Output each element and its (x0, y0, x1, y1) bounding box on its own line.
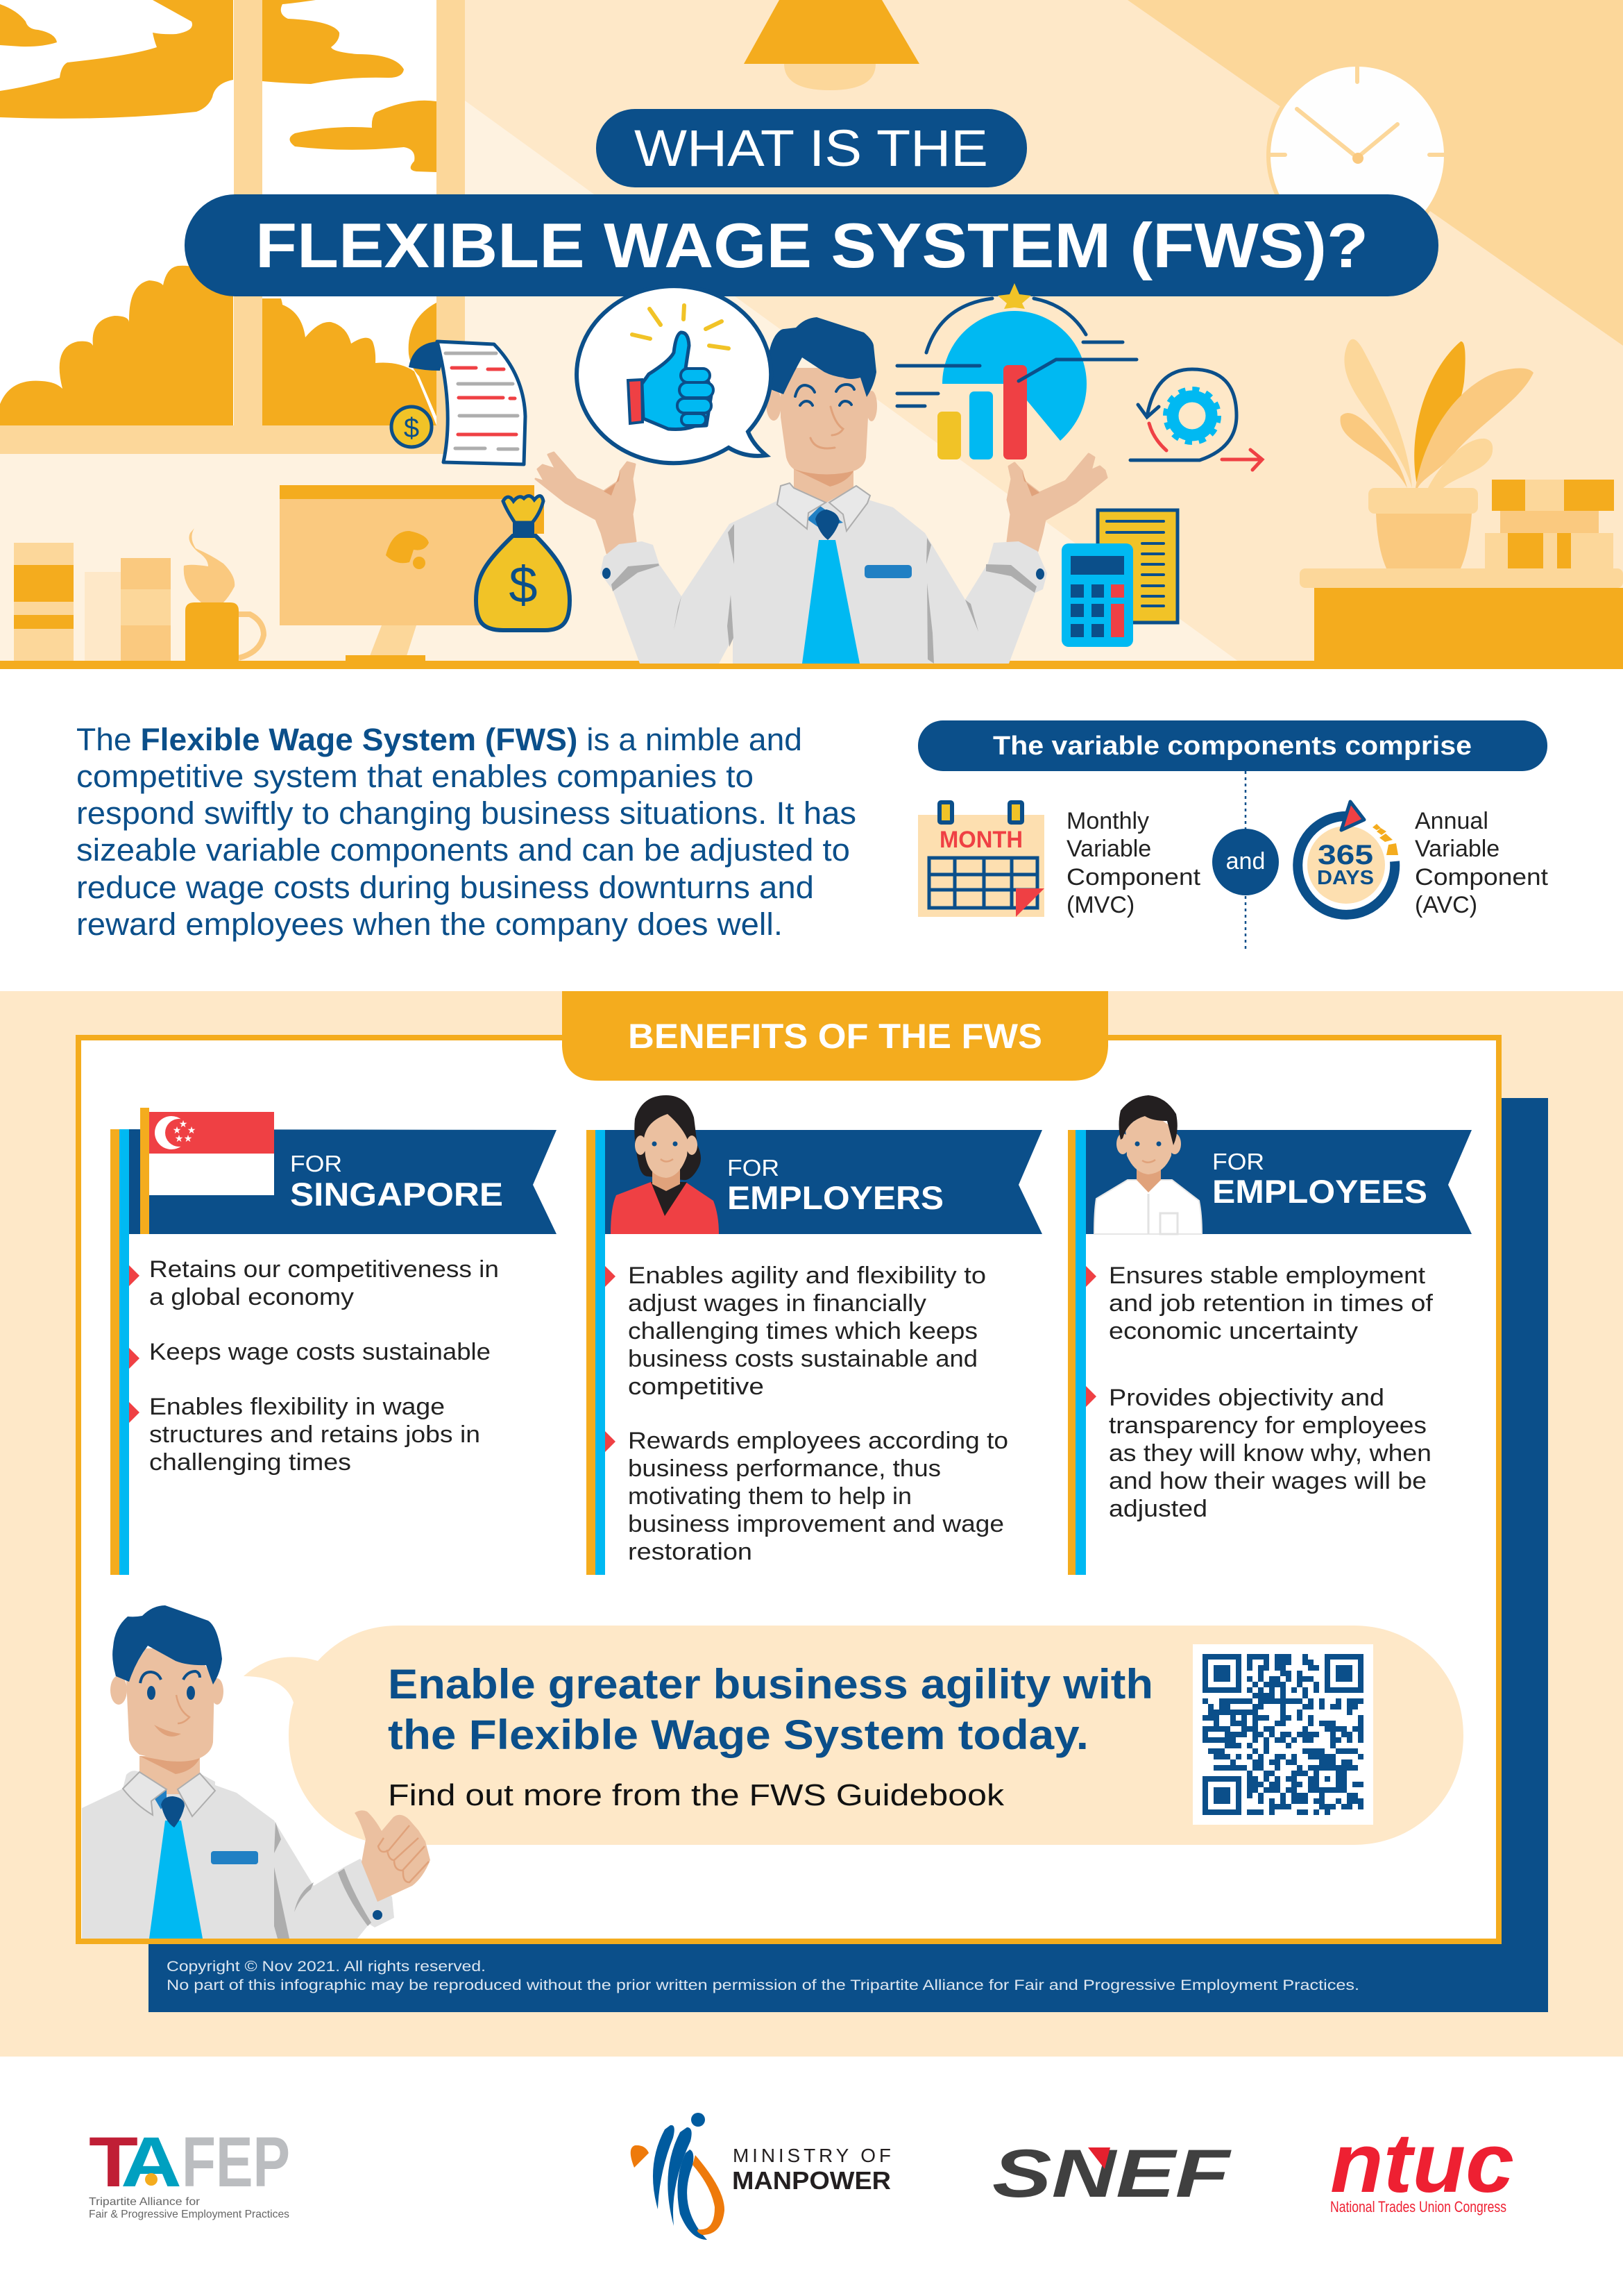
QR code (1193, 1644, 1373, 1825)
text: annual variable component: Variable (1415, 836, 1499, 862)
icon: singapore flag: ★ (184, 1133, 192, 1144)
ribbon title: FOR (1212, 1149, 1264, 1174)
title: what is the: WHAT IS THE (634, 119, 988, 177)
bullets (129, 1265, 139, 1423)
benefit list (1109, 1263, 1434, 1522)
intro paragraph: respond swiftly to changing business situations. It has (76, 795, 856, 831)
benefit list: business performance, thus (628, 1455, 941, 1482)
benefit list: Enables flexibility in wage (149, 1394, 445, 1420)
icon: singapore flag: ★ (187, 1124, 196, 1136)
intro paragraph: reduce wage costs during business downturns and (76, 870, 814, 905)
benefit list: a global economy (149, 1284, 354, 1310)
benefit list: business improvement and wage (628, 1511, 1004, 1537)
icon: monthly calendar (918, 802, 1044, 917)
ribbon title (290, 1151, 503, 1213)
window with clouds and bushes (0, 0, 465, 454)
collar (807, 506, 843, 527)
text: annual variable component: Annual (1415, 808, 1488, 834)
benefits section background (0, 991, 1623, 2057)
benefit list: structures and retains jobs in (149, 1421, 480, 1448)
text: annual variable component: (AVC) (1415, 892, 1477, 918)
benefit list: challenging times which keeps (628, 1318, 978, 1344)
right plant (1341, 339, 1533, 568)
text: annual variable component (1415, 808, 1549, 918)
coffee mug with steam (184, 528, 264, 664)
title: flexible wage system: FLEXIBLE WAGE SYSTEM (FWS)? (255, 211, 1368, 281)
benefit list: Ensures stable employment (1109, 1263, 1426, 1289)
figure: employee (1094, 1095, 1202, 1234)
benefit list: and how their wages will be (1109, 1468, 1427, 1494)
icon: 365 days cycle (1298, 802, 1398, 915)
call-to-action text: the Flexible Wage System today. (388, 1712, 1089, 1758)
benefit list: Keeps wage costs sustainable (149, 1339, 491, 1365)
logo: NTUC: National Trades Union Congress (1330, 2198, 1506, 2215)
figure: businesswoman (611, 1095, 719, 1234)
ribbon title: EMPLOYERS (727, 1179, 944, 1216)
ribbon title: FOR (290, 1151, 342, 1176)
logo: ministry of manpower (631, 2113, 891, 2240)
text: monthly variable component: (MVC) (1067, 892, 1135, 918)
ribbon title: SINGAPORE (290, 1176, 503, 1213)
copyright notice: No part of this infographic may be reproduced without the prior written permission of the Tripartite Alliance for Fair and Progressive Employment Practices. (167, 1977, 1359, 1993)
text: annual variable component: Component (1415, 864, 1549, 890)
icon: 365 days cycle: DAYS (1317, 867, 1374, 889)
benefit list: Retains our competitiveness in (149, 1256, 499, 1283)
benefit list: adjust wages in financially (628, 1290, 926, 1317)
benefit list: Rewards employees according to (628, 1428, 1008, 1454)
intro paragraph: reward employees when the company does well. (76, 906, 783, 942)
intro paragraph: sizeable variable components and can be adjusted to (76, 832, 850, 868)
badge (865, 565, 912, 578)
benefit list: transparency for employees (1109, 1412, 1427, 1439)
intro paragraph (76, 722, 856, 942)
logo: TAFEP: Tripartite Alliance for (89, 2196, 201, 2208)
icon: singapore flag (140, 1108, 274, 1234)
benefit list: business costs sustainable and (628, 1346, 978, 1372)
icon: 365 days cycle: 365 (1318, 840, 1373, 870)
benefit list: as they will know why, when (1109, 1440, 1431, 1467)
benefits card shadow and copyright bar (148, 1098, 1548, 2012)
benefit list: restoration (628, 1539, 752, 1565)
bullets (605, 1266, 615, 1452)
panel: for employees (1068, 1095, 1472, 1575)
icon: singapore flag: ★ (173, 1124, 181, 1136)
intro paragraph: The Flexible Wage System (FWS) is a nimble and (76, 722, 802, 757)
panel: for employers (586, 1095, 1042, 1575)
logo: NTUC: ntuc (1330, 2116, 1514, 2210)
ceiling lamp (744, 0, 919, 90)
benefit list: Enables agility and flexibility to (628, 1263, 986, 1289)
shirt folds (611, 524, 1037, 664)
ribbon title (727, 1155, 944, 1216)
benefit list: competitive (628, 1374, 764, 1400)
left hand and forearm (536, 453, 636, 553)
and badge: and (1226, 848, 1265, 875)
benefit list: Provides objectivity and (1109, 1385, 1384, 1411)
text: monthly variable component: Component (1067, 864, 1201, 890)
icon: speech bubble with thumbs up (577, 286, 771, 463)
icon: singapore flag: ★ (175, 1133, 183, 1144)
ribbon title: EMPLOYEES (1212, 1173, 1427, 1210)
benefits heading tab: BENEFITS OF THE FWS (628, 1017, 1042, 1056)
text: monthly variable component: Monthly (1067, 808, 1149, 834)
icon: receipt with coin: $ (404, 413, 419, 444)
logo: ministry of manpower: MINISTRY OF (733, 2145, 891, 2166)
bullets (1086, 1266, 1096, 1407)
copyright notice: Copyright © Nov 2021. All rights reserved. (167, 1959, 486, 1975)
right side table and books (1300, 480, 1623, 664)
panel: for singapore (110, 1108, 556, 1575)
title: flexible wage system (185, 194, 1438, 296)
benefit list (149, 1256, 499, 1476)
logo: TAFEP: FEP (182, 2122, 290, 2202)
copyright notice (167, 1959, 1359, 1993)
call-to-action text (388, 1661, 1153, 1812)
benefit list: challenging times (149, 1449, 351, 1476)
logo: TAFEP: T (89, 2122, 138, 2202)
left books (14, 543, 171, 664)
icon: gear cycle (1130, 369, 1262, 470)
tie (802, 540, 860, 664)
and badge (1212, 829, 1279, 895)
benefit list: adjusted (1109, 1496, 1207, 1522)
benefit list: economic uncertainty (1109, 1318, 1358, 1344)
right hand and forearm (1008, 454, 1107, 551)
call-to-action text: Enable greater business agility with (388, 1661, 1153, 1707)
text: monthly variable component (1067, 808, 1201, 918)
benefit list: and job retention in times of (1109, 1290, 1434, 1317)
icon: money bag (476, 496, 570, 630)
benefit list: motivating them to help in (628, 1483, 912, 1510)
wall clock (1268, 65, 1446, 246)
icon: singapore flag: ★ (179, 1118, 187, 1129)
logo: SNEF: SNEF (992, 2135, 1232, 2211)
benefit list (628, 1263, 1008, 1565)
title: what is the (596, 109, 1027, 187)
call-to-action text: Find out more from the FWS Guidebook (388, 1778, 1005, 1812)
icon: calculator and document (1062, 510, 1178, 647)
icon: monthly calendar: MONTH (940, 827, 1023, 853)
logo: TAFEP: Fair & Progressive Employment Practices (89, 2209, 289, 2220)
hero floor line (0, 661, 1623, 669)
hero illustration background (0, 0, 1623, 666)
logo: ministry of manpower: MANPOWER (732, 2166, 891, 2195)
neck (794, 465, 853, 503)
ribbon title (1212, 1149, 1427, 1210)
benefits card (78, 1038, 1499, 1941)
shirt (600, 483, 1047, 664)
businessman: hero figure (536, 317, 1107, 664)
ribbon title: FOR (727, 1155, 779, 1181)
logo: TAFEP: A (121, 2122, 182, 2202)
logo: TAFEP (89, 2122, 290, 2220)
icon: receipt with coin (391, 341, 525, 464)
head (766, 387, 781, 421)
desktop monitor (280, 485, 544, 665)
icon: pie chart and bars (897, 283, 1137, 459)
icon: money bag: $ (509, 556, 538, 614)
text: monthly variable component: Variable (1067, 836, 1151, 862)
businessman: thumbs up figure (82, 1605, 430, 1939)
intro paragraph: competitive system that enables companies to (76, 759, 754, 794)
variable components heading pill: The variable components comprise (993, 732, 1472, 761)
variable components heading pill (918, 720, 1547, 771)
benefits heading tab (562, 991, 1108, 1081)
call-to-action speech bubble (244, 1626, 1463, 1845)
